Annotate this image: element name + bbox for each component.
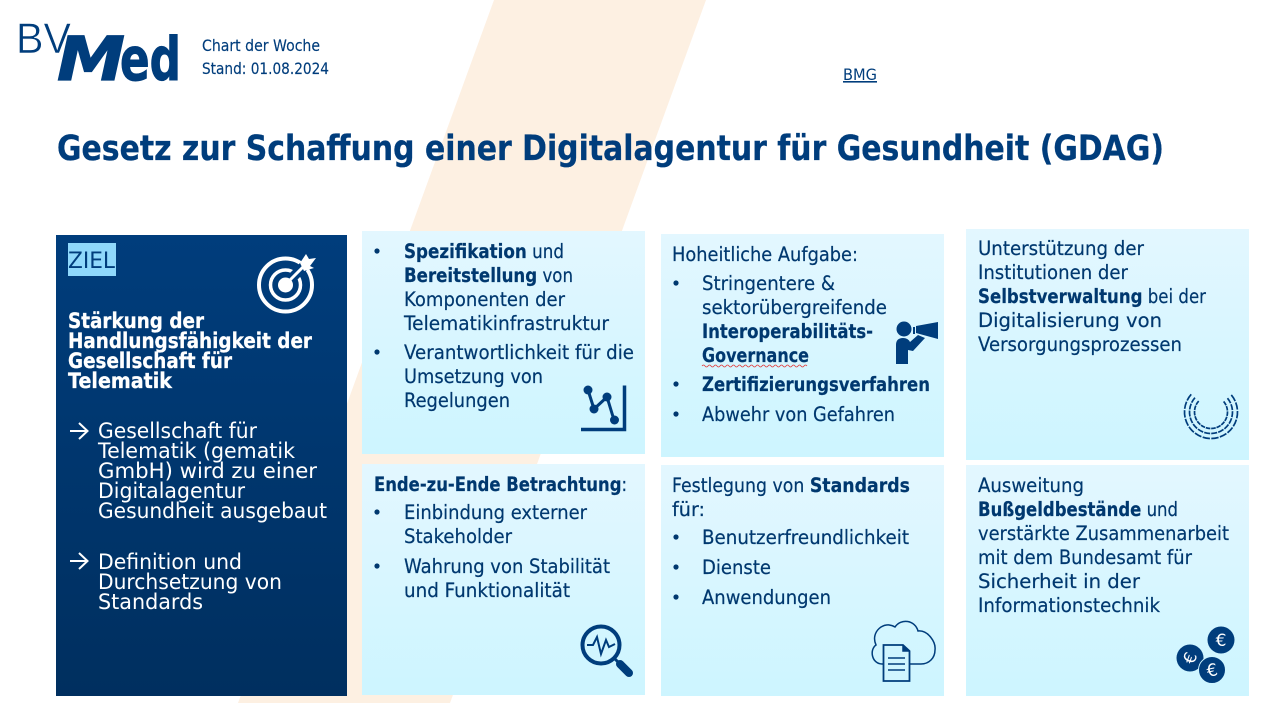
panel: Hoheitliche Aufgabe — [661, 234, 944, 457]
text: Bußgeldbestände: Ausweitung — [978, 474, 1084, 497]
text: Bußgeldbestände: Informationstechnik — [978, 594, 1161, 617]
text: Hoheitliche Aufgabe list: Governance — [702, 344, 809, 367]
icon: euro coins: € — [1216, 631, 1226, 651]
text: Bußgeldbestände: verstärkte Zusammenarbeit — [978, 522, 1229, 545]
text: Spezifikation list — [374, 240, 634, 412]
text: Ende-zu-Ende list: Ende-zu-Ende Betrachtung: — [374, 473, 627, 496]
item: definition of standards: Durchsetzung von — [98, 570, 282, 595]
text: Ende-zu-Ende list: Wahrung von Stabilität — [404, 555, 610, 578]
text: Standards list: Anwendungen — [702, 586, 831, 609]
text: Selbstverwaltung: Institutionen der — [978, 261, 1129, 284]
text: Standards list: Dienste — [702, 556, 771, 579]
icon: person with megaphone — [896, 322, 938, 364]
item: gematik becomes Digitalagentur: Digitalagentur — [98, 479, 245, 504]
text: Standards list — [672, 474, 910, 609]
item: gematik becomes Digitalagentur: GmbH) wird zu einer — [98, 459, 317, 484]
text: Standards list: Benutzerfreundlichkeit — [702, 526, 909, 549]
text: Bußgeldbestände: Bußgeldbestände und — [978, 498, 1178, 521]
item: gematik becomes Digitalagentur: Telematik (gematik — [97, 439, 296, 464]
header note: chart of the week and date: Stand: 01.08.2024 — [202, 59, 329, 78]
text: Spezifikation list: Bereitstellung von — [404, 264, 573, 287]
icon: euro coins: € — [1180, 650, 1202, 667]
item: definition of standards: Definition und — [98, 550, 242, 575]
icon: euro coins — [1176, 626, 1234, 684]
text: Bußgeldbestände: Sicherheit in der — [978, 570, 1141, 593]
text: Hoheitliche Aufgabe list: Stringentere & — [702, 272, 835, 295]
text: Spezifikation list: Umsetzung von — [404, 365, 543, 388]
text: Spezifikation list: Komponenten der — [404, 288, 566, 311]
panel: Spezifikation — [362, 231, 645, 454]
text: Spezifikation list: Spezifikation und — [404, 240, 564, 263]
text: Hoheitliche Aufgabe list: Zertifizierungsverfahren — [702, 373, 930, 396]
text: Bußgeldbestände: mit dem Bundesamt für — [978, 546, 1193, 569]
label: ZIEL: ZIEL — [68, 249, 116, 274]
heading: Stärkung der Handlungsfähigkeit: Handlungsfähigkeit der — [68, 329, 312, 354]
panel: Bußgeldbestände — [966, 465, 1249, 696]
text: Selbstverwaltung — [978, 237, 1207, 356]
panel: Ende-zu-Ende — [362, 464, 645, 695]
text: Spezifikation list: Telematikinfrastruktur — [403, 312, 610, 335]
heading: Stärkung der Handlungsfähigkeit: Telematik — [68, 369, 173, 394]
text: Selbstverwaltung: Selbstverwaltung bei der — [978, 285, 1207, 308]
text: Standards list: für: — [672, 498, 705, 521]
text: Spezifikation list: Regelungen — [404, 389, 510, 412]
icon: magnifier with pulse — [582, 626, 629, 673]
text: Hoheitliche Aufgabe list — [672, 243, 930, 426]
panel: Selbstverwaltung — [966, 229, 1249, 460]
header note: chart of the week and date — [202, 36, 329, 78]
text: Hoheitliche Aufgabe list: Interoperabilitäts- — [702, 320, 873, 343]
text: Selbstverwaltung: Versorgungsprozessen — [978, 333, 1182, 356]
logo: BVMed: ed — [120, 25, 181, 95]
header note: chart of the week and date: Chart der Woche — [202, 36, 320, 55]
heading: Stärkung der Handlungsfähigkeit — [68, 309, 312, 394]
item: gematik becomes Digitalagentur — [70, 419, 327, 524]
text: Selbstverwaltung: Unterstützung der — [978, 237, 1145, 260]
text: Hoheitliche Aufgabe list: sektorübergreifende — [702, 296, 887, 319]
logo: BVMed: BV — [16, 15, 71, 63]
icon: euro coins: € — [1205, 660, 1220, 682]
text: Ende-zu-Ende list: Einbindung externer — [404, 501, 588, 524]
icon: parliament seating — [1174, 375, 1248, 449]
heading: Stärkung der Handlungsfähigkeit: Stärkung der — [68, 309, 204, 334]
icon: line chart — [581, 386, 624, 430]
item: gematik becomes Digitalagentur: Gesundheit ausgebaut — [98, 499, 327, 524]
text: Selbstverwaltung: Digitalisierung von — [978, 309, 1162, 332]
panel: ziel — [56, 235, 347, 696]
text: Standards list: Festlegung von Standards — [672, 474, 910, 497]
source link: BMG: BMG — [843, 65, 877, 84]
item: definition of standards: Standards — [98, 590, 203, 615]
item: gematik becomes Digitalagentur: Gesellschaft für — [98, 419, 257, 444]
logo: BVMed: M — [57, 24, 125, 95]
icon: target with arrow — [259, 254, 316, 312]
text: Hoheitliche Aufgabe list: Hoheitliche Aufgabe: — [672, 243, 858, 266]
panel: Standards — [661, 465, 944, 696]
item: definition of standards — [70, 550, 282, 615]
icon: cloud with document — [872, 621, 935, 681]
text: Ende-zu-Ende list: und Funktionalität — [404, 579, 570, 602]
text: Spezifikation list: Verantwortlichkeit für die — [404, 341, 634, 364]
heading: Stärkung der Handlungsfähigkeit: Gesellschaft für — [68, 349, 232, 374]
text: Bußgeldbestände — [978, 474, 1229, 617]
text: Ende-zu-Ende list — [374, 473, 627, 602]
text: Ende-zu-Ende list: Stakeholder — [404, 525, 513, 548]
text: Hoheitliche Aufgabe list: Abwehr von Gefahren — [702, 403, 895, 426]
logo: BVMed — [16, 15, 181, 95]
